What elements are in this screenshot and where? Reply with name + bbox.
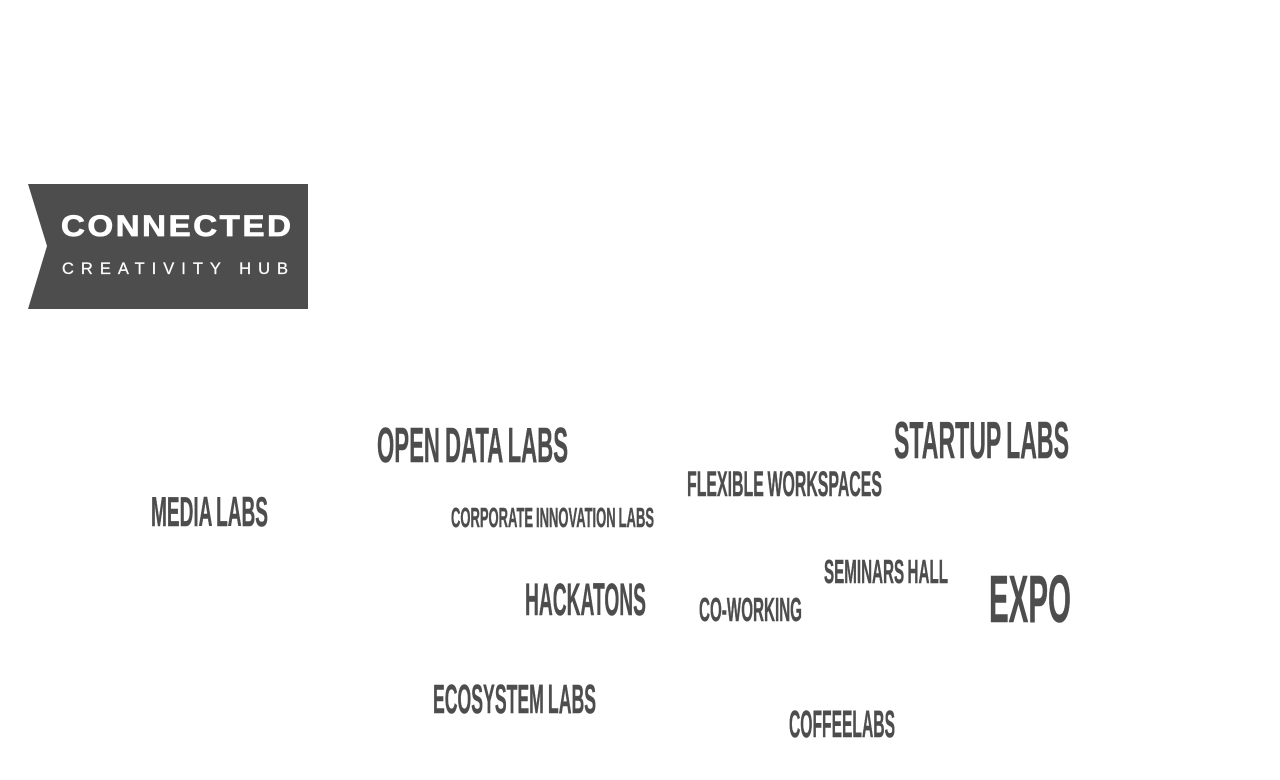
text: EXPO bbox=[989, 562, 1071, 637]
text: CORPORATE INNOVATION LABS bbox=[451, 502, 654, 533]
text: CO-WORKING bbox=[699, 591, 802, 628]
logo banner shape bbox=[28, 184, 308, 309]
text: FLEXIBLE WORKSPACES bbox=[687, 465, 882, 504]
text: STARTUP LABS bbox=[894, 412, 1069, 470]
text: ECOSYSTEM LABS bbox=[433, 676, 596, 722]
logo tagline: Creativity Hub: CREATIVITY HUB bbox=[62, 260, 288, 278]
text: COFFEELABS bbox=[789, 704, 895, 746]
logo wordmark: Connected: CONNECTED bbox=[61, 208, 291, 243]
text: OPEN DATA LABS bbox=[377, 418, 568, 473]
text: SEMINARS HALL bbox=[824, 553, 948, 590]
text: MEDIA LABS bbox=[151, 488, 268, 535]
logo: Connected Creativity Hub banner bbox=[28, 184, 308, 309]
text: HACKATONS bbox=[525, 574, 646, 625]
